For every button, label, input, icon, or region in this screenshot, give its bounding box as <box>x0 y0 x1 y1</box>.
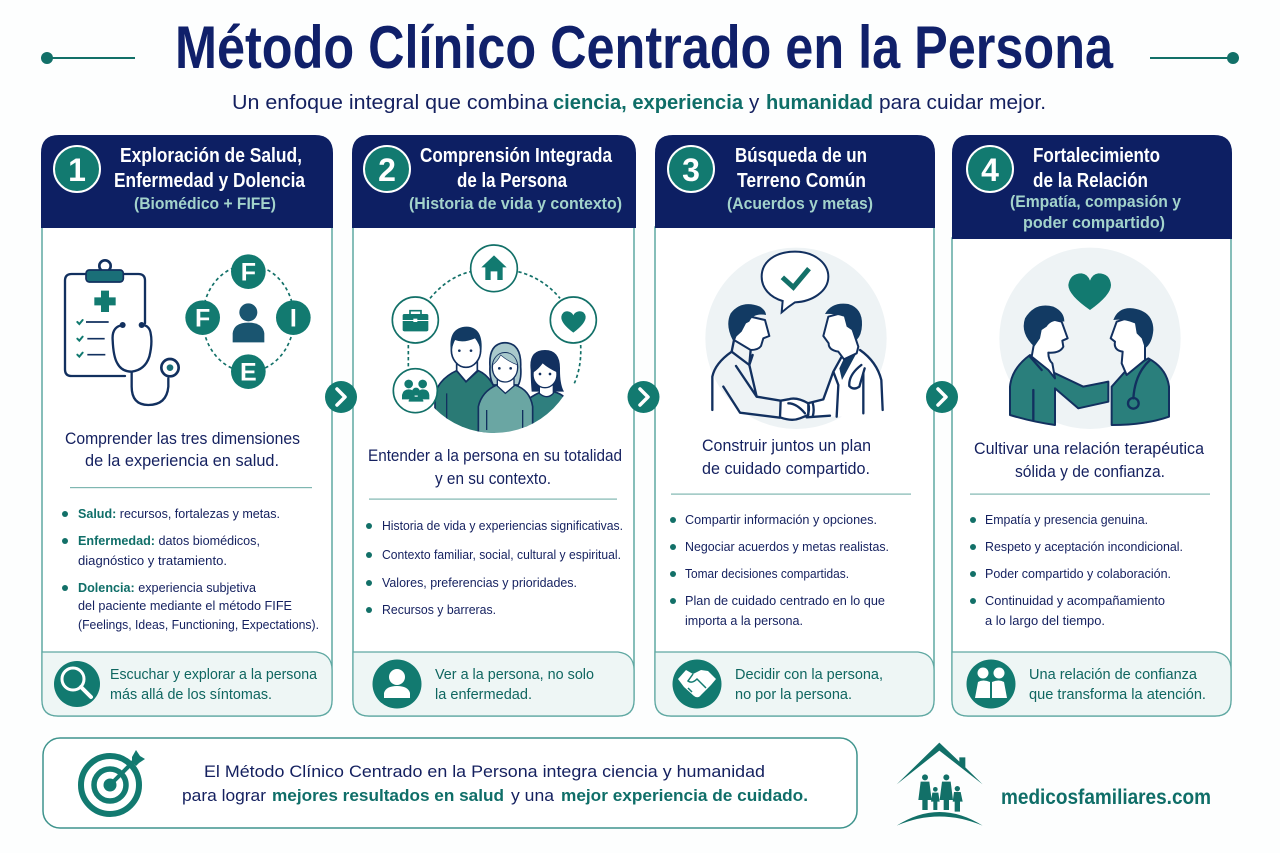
callout 1 <box>42 652 332 716</box>
illustration: handshake <box>705 248 887 429</box>
callout 1: más allá de los síntomas. <box>110 687 272 703</box>
illustration: empathy <box>999 248 1181 429</box>
header 3: Terreno Común <box>737 170 866 192</box>
header 3: (Acuerdos y metas) <box>727 194 873 213</box>
icon: briefcase <box>392 297 438 343</box>
illustration: person in context <box>392 245 596 437</box>
subtitle: para cuidar mejor. <box>879 91 1046 114</box>
callout 4 <box>952 652 1231 716</box>
list 1: del paciente mediante el método FIFE <box>78 599 292 613</box>
callout 3: no por la persona. <box>735 687 852 703</box>
patient <box>712 304 781 418</box>
title: Método Clínico Centrado en la Persona <box>175 14 1114 81</box>
list 2: Recursos y barreras. <box>382 603 496 617</box>
list 1: Dolencia: experiencia subjetiva <box>78 581 256 595</box>
list 1: Enfermedad: datos biomédicos, <box>78 534 260 548</box>
diagram: FIFE: I <box>290 304 297 332</box>
list 4: a lo largo del tiempo. <box>985 614 1105 628</box>
conclusion text <box>182 762 808 805</box>
icon: house <box>471 245 517 292</box>
header 4: poder compartido) <box>1023 213 1165 232</box>
callout 3: Decidir con la persona, <box>735 667 883 683</box>
description 1: de la experiencia en salud. <box>85 452 279 470</box>
list 4: Continuidad y acompañamiento <box>985 594 1165 608</box>
list 2: Contexto familiar, social, cultural y espiritual. <box>382 548 621 562</box>
callout 2: Ver a la persona, no solo <box>435 667 594 683</box>
conclusion text: mejores resultados en salud <box>272 786 504 805</box>
list 4 <box>970 513 1183 628</box>
header 3 <box>655 135 935 228</box>
conclusion text: mejor experiencia de cuidado. <box>561 786 808 805</box>
description 4: sólida y de confianza. <box>1015 463 1165 481</box>
description 1 <box>65 430 300 470</box>
diagram: FIFE <box>185 254 311 389</box>
header 3: Búsqueda de un <box>735 145 867 167</box>
subtitle: y <box>749 91 760 114</box>
callout 2: la enfermedad. <box>435 687 532 703</box>
person right <box>1111 308 1169 425</box>
panel: paso 1 <box>41 135 333 716</box>
conclusion text: El Método Clínico Centrado en la Persona integra ciencia y humanidad <box>204 762 765 781</box>
conclusion text: para lograr <box>182 786 266 805</box>
girl <box>530 350 564 392</box>
header 2 <box>352 135 636 228</box>
list 1: diagnóstico y tratamiento. <box>78 554 227 568</box>
list 1 <box>62 507 319 632</box>
list 3: importa a la persona. <box>685 614 803 628</box>
subtitle <box>232 91 1046 114</box>
description 2: y en su contexto. <box>435 470 551 488</box>
subtitle: Un enfoque integral que combina <box>232 91 549 114</box>
list 4: Poder compartido y colaboración. <box>985 567 1171 581</box>
description 3 <box>702 437 871 478</box>
header 1 <box>41 135 333 228</box>
list 2: Valores, preferencias y prioridades. <box>382 576 577 590</box>
callout 4: Una relación de confianza <box>1029 667 1198 683</box>
woman <box>490 343 521 385</box>
list 3: Tomar decisiones compartidas. <box>685 567 849 581</box>
person left <box>1010 306 1108 425</box>
callout 2 <box>353 652 634 716</box>
icon: target <box>81 750 145 814</box>
header 2: de la Persona <box>457 170 568 192</box>
list 2 <box>366 519 623 617</box>
header 2: Comprensión Integrada <box>420 145 613 167</box>
header 4: de la Relación <box>1033 170 1148 192</box>
header 2: 2 <box>378 152 396 188</box>
description 2 <box>368 447 622 488</box>
list 2: Historia de vida y experiencias significativas. <box>382 519 623 533</box>
hands <box>780 399 808 420</box>
doctor <box>807 304 883 417</box>
description 1: Comprender las tres dimensiones <box>65 430 300 448</box>
list 1: Salud: recursos, fortalezas y metas. <box>78 507 280 521</box>
conclusion text: y una <box>511 786 555 805</box>
description 3: de cuidado compartido. <box>702 460 870 478</box>
diagram: FIFE: F <box>241 258 256 286</box>
arrow 1 <box>325 381 357 413</box>
list 1: (Feelings, Ideas, Functioning, Expectations). <box>78 618 319 632</box>
arrow 3 <box>926 381 958 413</box>
conclusion banner <box>43 738 857 828</box>
icon: heart <box>550 297 596 343</box>
header 1: (Biomédico + FIFE) <box>134 194 276 213</box>
header 1: Exploración de Salud, <box>120 145 302 167</box>
header 2: (Historia de vida y contexto) <box>409 194 622 213</box>
icon: heart <box>1068 273 1111 310</box>
panel: paso 2 <box>352 135 636 716</box>
panel: paso 3 <box>655 135 935 716</box>
logo <box>897 743 1211 826</box>
header 3: 3 <box>682 152 700 188</box>
description 4 <box>974 440 1205 481</box>
callout 4: que transforma la atención. <box>1029 687 1206 703</box>
header 1: Enfermedad y Dolencia <box>114 170 306 192</box>
header 4 <box>952 135 1232 239</box>
diagram: FIFE: E <box>240 358 257 386</box>
icon: group <box>393 369 437 413</box>
list 4: Empatía y presencia genuina. <box>985 513 1148 527</box>
header 4: (Empatía, compasión y <box>1010 192 1181 211</box>
callout 3 <box>655 652 934 716</box>
description 4: Cultivar una relación terapéutica <box>974 440 1205 458</box>
subtitle: ciencia, experiencia <box>553 91 744 114</box>
header 1: 1 <box>68 152 86 188</box>
list 3: Negociar acuerdos y metas realistas. <box>685 540 889 554</box>
description 2: Entender a la persona en su totalidad <box>368 447 622 465</box>
header 4: 4 <box>981 152 999 188</box>
list 4: Respeto y aceptación incondicional. <box>985 540 1183 554</box>
logo: medicosfamiliares.com <box>1001 786 1211 809</box>
list 3: Compartir información y opciones. <box>685 513 877 527</box>
header 4: Fortalecimiento <box>1033 145 1160 167</box>
list 3 <box>670 513 889 628</box>
callout 1: Escuchar y explorar a la persona <box>110 667 318 683</box>
subtitle: humanidad <box>766 91 873 114</box>
speech bubble <box>762 252 828 312</box>
description 3: Construir juntos un plan <box>702 437 871 455</box>
panel: paso 4 <box>952 135 1232 716</box>
man <box>435 371 494 437</box>
arrow 2 <box>628 381 660 413</box>
icon: clipboard and stethoscope <box>65 260 179 405</box>
list 3: Plan de cuidado centrado en lo que <box>685 594 885 608</box>
diagram: FIFE: F <box>195 304 210 332</box>
